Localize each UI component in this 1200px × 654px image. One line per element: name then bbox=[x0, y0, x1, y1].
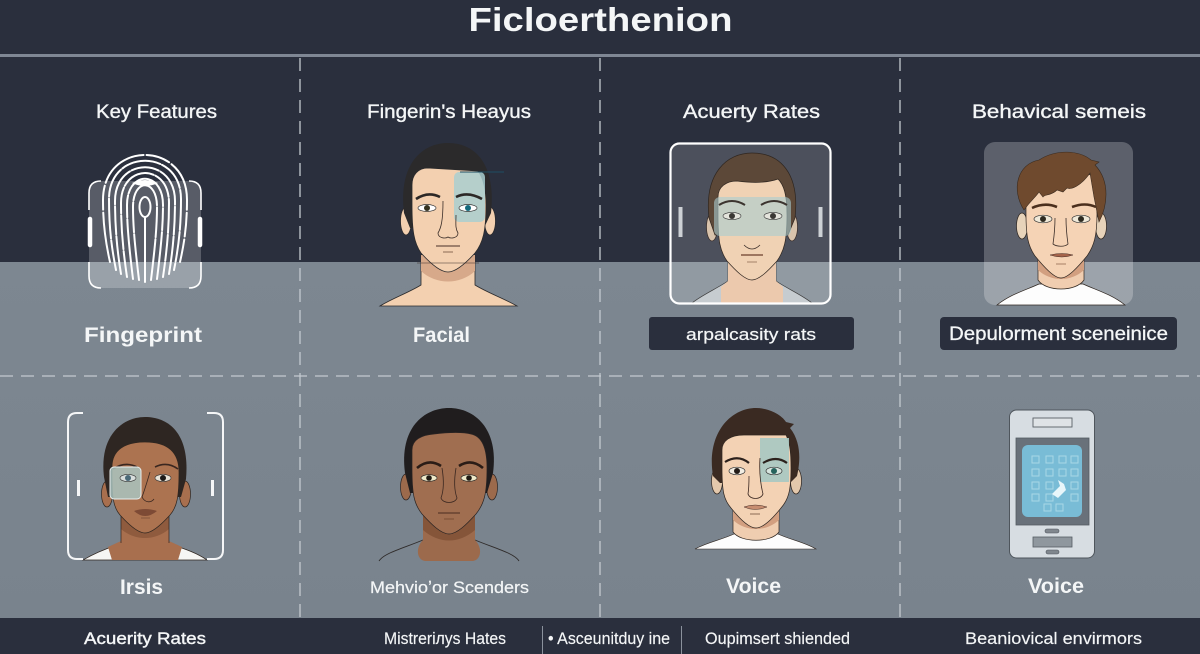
label: fingerprint: Fingeprint bbox=[84, 324, 202, 347]
panel: accuracy portrait in scan frame bbox=[670, 144, 830, 304]
label: facial: Facial bbox=[413, 324, 470, 347]
heading: behavioral: Behavical semeis bbox=[972, 102, 1146, 123]
footer bar text bbox=[84, 626, 1142, 654]
label box: deployment bbox=[940, 317, 1177, 350]
label box: accuracy bbox=[649, 317, 854, 350]
panel: behavior portrait bbox=[379, 408, 519, 561]
heading: fingerprint features: Fingerin's Heayus bbox=[367, 102, 531, 123]
footer bar text: Acuerity Rates bbox=[84, 629, 206, 648]
footer bar text: Beaniovical envirmors bbox=[965, 629, 1142, 648]
panel: voice portrait bbox=[695, 408, 816, 549]
label: voice: Voice bbox=[726, 575, 781, 598]
footer bar text: Mistreriлys Hates bbox=[384, 629, 506, 648]
title: Ficloerthenion bbox=[468, 1, 732, 38]
panel: iris portrait bbox=[68, 413, 223, 560]
label box: accuracy: arpalcasity rats bbox=[686, 325, 816, 344]
heading: key features: Key Features bbox=[96, 102, 217, 123]
footer bar text: • Asceunitduy ine bbox=[548, 629, 670, 648]
label: iris: Irsis bbox=[120, 576, 163, 599]
label box: deployment: Depulorment sceneinice bbox=[949, 324, 1168, 345]
icon: phone bbox=[1010, 410, 1094, 558]
footer bar text: Oupimsert shiended bbox=[705, 629, 850, 648]
heading: accuracy rates: Acuerty Rates bbox=[683, 102, 820, 123]
panel: facial portrait bbox=[380, 143, 517, 306]
label: voice device: Voice bbox=[1028, 575, 1084, 598]
panel: behavioral portrait bbox=[984, 142, 1133, 305]
panel: fingerprint icon bbox=[89, 155, 201, 288]
label: behavior scenarios: Mehvioʼor Scenders bbox=[370, 578, 529, 597]
